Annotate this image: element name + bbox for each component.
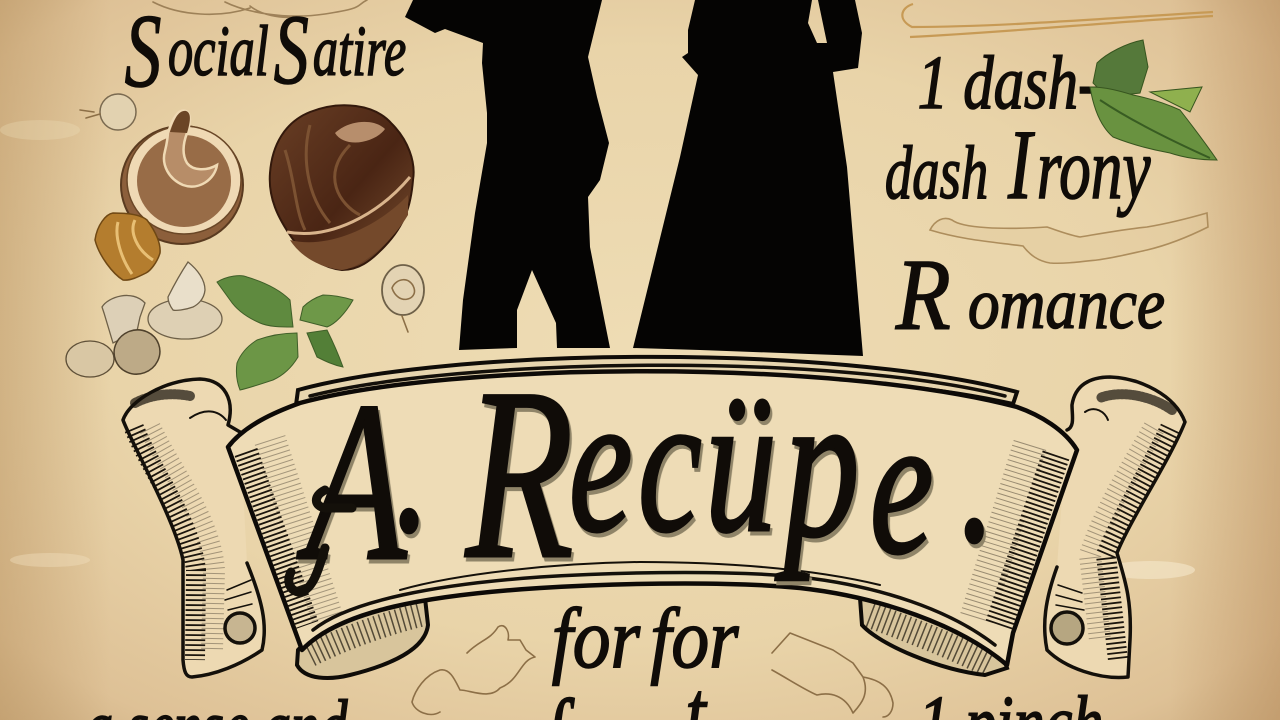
Romance ingredient: R — [895, 238, 951, 351]
top left flourish — [153, 0, 367, 17]
ribbon: back strip — [296, 357, 1017, 405]
title: A Recipe: ü — [705, 352, 777, 574]
illustration: walnut — [95, 213, 160, 280]
right ingredient: 1 dash: 1 — [918, 41, 948, 125]
title: A Recipe: R — [464, 339, 574, 610]
illustration: halved fruit — [121, 111, 243, 244]
title: A Recipe: A — [297, 355, 408, 607]
bottom left flourish — [412, 626, 535, 714]
ribbon: right tail — [1045, 377, 1185, 677]
right ingredient: dash Irony: I — [1007, 108, 1035, 220]
ribbon: left fold — [297, 598, 428, 678]
ribbon: right fold — [860, 598, 1007, 675]
ribbon: left tail — [123, 379, 264, 677]
right ingredient: dash Irony: dash — [885, 131, 988, 215]
right ingredient: dash Irony: rony — [1037, 120, 1151, 218]
title: A Recipe: e — [870, 374, 934, 596]
illustration: large chestnut — [270, 105, 414, 270]
title: A Recipe: p — [775, 348, 860, 581]
ribbon banner — [123, 357, 1185, 678]
title: A Recipe: . — [395, 352, 431, 574]
illustration: mint leaves right — [1090, 40, 1217, 160]
subtitle: for for: for — [552, 591, 641, 686]
flourish under Irony — [930, 213, 1208, 263]
Romance ingredient: omance — [968, 264, 1165, 344]
silhouette: woman — [633, 0, 863, 356]
top right flourish — [902, 4, 1213, 37]
illustration: basil leaves left — [217, 276, 353, 390]
illustration: small sketched bulb — [80, 94, 136, 130]
subtitle: for for: for — [650, 591, 739, 686]
title: A Recipe: e — [569, 352, 633, 574]
title: A Recipe: . — [960, 362, 996, 584]
illustration: garlic cup and bowl — [102, 262, 222, 343]
title swash on A — [289, 490, 352, 592]
illustration: nuts — [66, 323, 166, 381]
silhouette: man — [405, 0, 610, 350]
right ingredient: 1 dash: dash- — [963, 41, 1098, 125]
illustration: sketched onion — [382, 265, 424, 332]
left heading: Social Satire: ocial — [168, 12, 269, 91]
bottom right flourish — [772, 633, 893, 717]
ribbon: main panel — [228, 371, 1077, 665]
title: A Recipe: c — [638, 352, 702, 574]
left heading: Social Satire: atire — [313, 12, 406, 91]
